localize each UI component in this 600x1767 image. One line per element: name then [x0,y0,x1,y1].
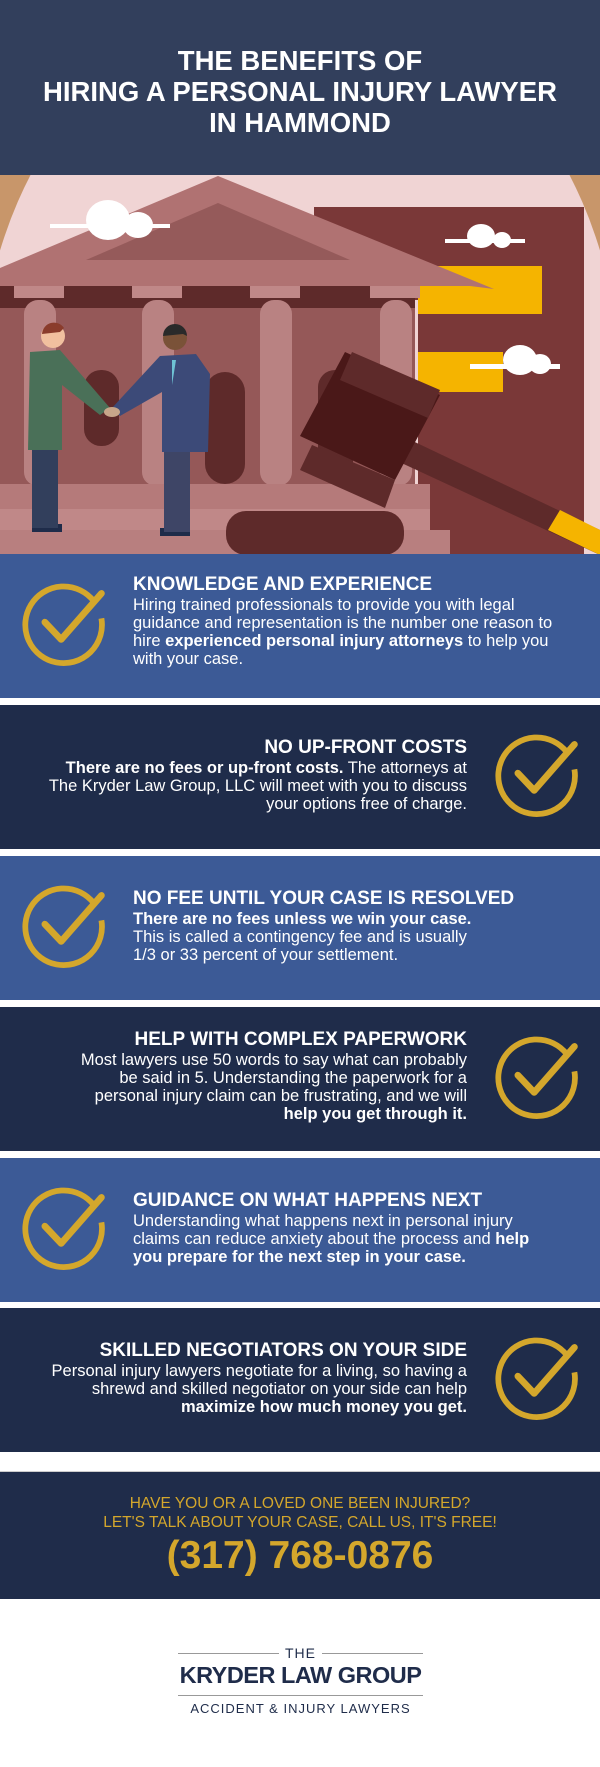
text block: NO UP-FRONT COSTS [264,737,467,758]
icon: check circle [22,584,105,666]
panel: complex paperwork [0,1007,600,1151]
text block [49,737,467,813]
logo: ACCIDENT & INJURY LAWYERS [190,1701,411,1716]
people [28,323,210,536]
text block: Personal injury lawyers negotiate for a living, so having a [52,1362,467,1380]
text block: Most lawyers use 50 words to say what can probably [81,1051,467,1069]
gavel [226,352,600,555]
panel: no fee until resolved [0,856,600,1000]
text block: The Kryder Law Group, LLC will meet with you to discuss [49,777,467,795]
text block: This is called a contingency fee and is usually [133,928,467,946]
icon: check circle [22,1188,105,1270]
cta text [103,1495,497,1531]
logo: KRYDER LAW GROUP [180,1662,421,1688]
text block: HELP WITH COMPLEX PAPERWORK [134,1029,467,1050]
text block: be said in 5. Understanding the paperwork for a [119,1069,467,1087]
icon: check circle [495,734,578,817]
panel: skilled negotiators [0,1308,600,1452]
text block: SKILLED NEGOTIATORS ON YOUR SIDE [100,1340,467,1361]
header title: THE BENEFITS OF [178,45,422,76]
cta text: LET'S TALK ABOUT YOUR CASE, CALL US, IT'S FREE! [103,1514,497,1531]
panel: knowledge and experience [0,554,600,698]
illustration: courthouse with handshake and gavel [0,175,600,554]
text block: personal injury claim can be frustrating, and we will [95,1087,467,1105]
text block: GUIDANCE ON WHAT HAPPENS NEXT [133,1190,482,1211]
clouds [50,200,560,375]
text block: KNOWLEDGE AND EXPERIENCE [133,574,432,595]
cta text: HAVE YOU OR A LOVED ONE BEEN INJURED? [130,1495,470,1512]
header title: IN HAMMOND [209,107,391,138]
icon: check circle [22,886,105,968]
text block [133,574,552,668]
text block: 1/3 or 33 percent of your settlement. [133,946,398,964]
header title [0,0,600,175]
text block: hire experienced personal injury attorneys to help you [133,632,548,650]
panel: guidance on what happens next [0,1158,600,1302]
text block [81,1029,467,1123]
text block: help you get through it. [284,1105,467,1123]
text block [133,1190,529,1266]
text block: shrewd and skilled negotiator on your side can help [92,1380,467,1398]
text block: with your case. [133,650,243,668]
text block: There are no fees unless we win your case. [133,910,471,928]
icon: check circle [495,1338,578,1420]
text block: guidance and representation is the number one reason to [133,614,552,632]
phone number: (317) 768-0876 [167,1534,433,1577]
text block [133,888,514,964]
logo [178,1645,423,1716]
panel: no up-front costs [0,705,600,849]
text block [52,1340,467,1416]
text block: claims can reduce anxiety about the process and help [133,1230,529,1248]
header title: HIRING A PERSONAL INJURY LAWYER [43,76,557,107]
text block: Understanding what happens next in personal injury [133,1212,513,1230]
text block: you prepare for the next step in your case. [133,1248,466,1266]
call to action panel [0,1471,600,1599]
text block: maximize how much money you get. [181,1398,467,1416]
text block: Hiring trained professionals to provide you with legal [133,596,515,614]
text block: There are no fees or up-front costs. The attorneys at [66,759,467,777]
text block: NO FEE UNTIL YOUR CASE IS RESOLVED [133,888,514,909]
text block: your options free of charge. [266,795,467,813]
icon: check circle [495,1036,578,1119]
logo: THE [285,1645,316,1661]
